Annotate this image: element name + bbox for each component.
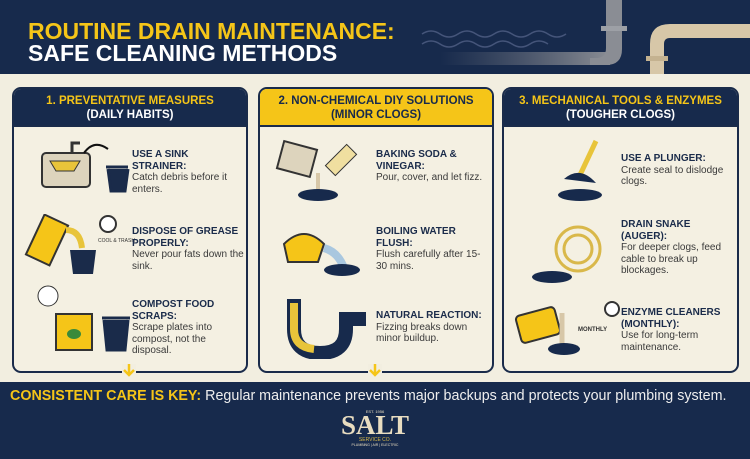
arrow: panel1 [122, 364, 136, 377]
arrow: panel2 [368, 364, 382, 377]
icon: grease [24, 214, 135, 274]
text: drain snake [621, 219, 721, 276]
text: natural reaction [376, 310, 482, 344]
text: grease: DISPOSE OF GREASE PROPERLY: [132, 226, 238, 248]
text: boiling water [376, 226, 480, 272]
text: drain snake: For deeper clogs, feed cable to break up blockages. [621, 242, 721, 276]
panel header 2: 2. NON-CHEMICAL DIY SOLUTIONS [278, 95, 474, 107]
text: strainer: USE A SINK STRAINER: [132, 149, 188, 172]
text: baking soda: BAKING SODA & VINEGAR: [376, 149, 457, 172]
panel header 1: 1. PREVENTATIVE MEASURES [46, 95, 214, 107]
icon: enzyme: MONTHLY [578, 327, 607, 333]
icon: drain snake [532, 226, 602, 283]
text: enzyme: Use for long-term maintenance. [621, 330, 698, 352]
panel header 2 [260, 89, 492, 127]
panel header 1: (DAILY HABITS) [87, 109, 173, 121]
footer message: CONSISTENT CARE IS KEY: Regular maintenance prevents major backups and protects your plumbing system. [10, 388, 726, 404]
logo: EST. 1956 [366, 409, 384, 414]
text: grease [132, 226, 244, 272]
text: compost [132, 299, 214, 356]
text: drain snake: DRAIN SNAKE (AUGER): [621, 219, 690, 242]
panel header 3: 3. MECHANICAL TOOLS & ENZYMES [519, 95, 722, 107]
icon: grease: COOL & TRASH [98, 238, 135, 244]
footer band [0, 382, 750, 459]
panel: preventative [12, 87, 248, 373]
header band [0, 0, 750, 74]
text: plunger: Create seal to dislodge clogs. [621, 164, 723, 187]
panel header 3: (TOUGHER CLOGS) [566, 109, 675, 121]
icon: compost [38, 286, 130, 352]
header band: SAFE CLEANING METHODS [28, 40, 337, 66]
text: baking soda: Pour, cover, and let fizz. [376, 172, 482, 183]
text: compost: Scrape plates into compost, not the disposal. [132, 322, 212, 356]
logo: SALT [341, 410, 409, 440]
text: strainer: Catch debris before it enters. [132, 172, 227, 194]
title: ROUTINE DRAIN MAINTENANCE: [28, 18, 395, 44]
text: boiling water: BOILING WATER FLUSH: [376, 226, 456, 248]
text: grease: Never pour fats down the sink. [132, 249, 244, 272]
text: natural reaction: NATURAL REACTION: [376, 310, 482, 321]
icon: sink strainer [41, 142, 130, 192]
panel header 3 [504, 89, 737, 127]
text: compost: COMPOST FOOD SCRAPS: [132, 299, 214, 322]
text: strainer [132, 149, 227, 194]
icon: plunger [558, 140, 602, 201]
icon: pipe trap [287, 299, 366, 359]
icon: enzyme [514, 301, 620, 355]
logo: PLUMBING | AIR | ELECTRIC [352, 443, 398, 447]
text: boiling water: Flush carefully after 15-30 mins. [376, 249, 480, 272]
icon: baking soda [276, 140, 358, 201]
text: natural reaction: Fizzing breaks down minor buildup. [376, 322, 467, 344]
text: plunger [621, 153, 723, 187]
text: baking soda [376, 149, 482, 183]
pipes illustration [422, 0, 750, 74]
text: plunger: USE A PLUNGER: [621, 153, 706, 164]
panel: mechanical [502, 87, 739, 373]
text: enzyme [621, 307, 720, 352]
panel header 2: (MINOR CLOGS) [331, 109, 421, 121]
text: enzyme: ENZYME CLEANERS (MONTHLY): [621, 307, 720, 330]
panel header 1 [14, 89, 246, 127]
icon: kettle [282, 233, 360, 276]
panel: diy [258, 87, 494, 373]
logo: SERVICE CO. [359, 437, 391, 443]
